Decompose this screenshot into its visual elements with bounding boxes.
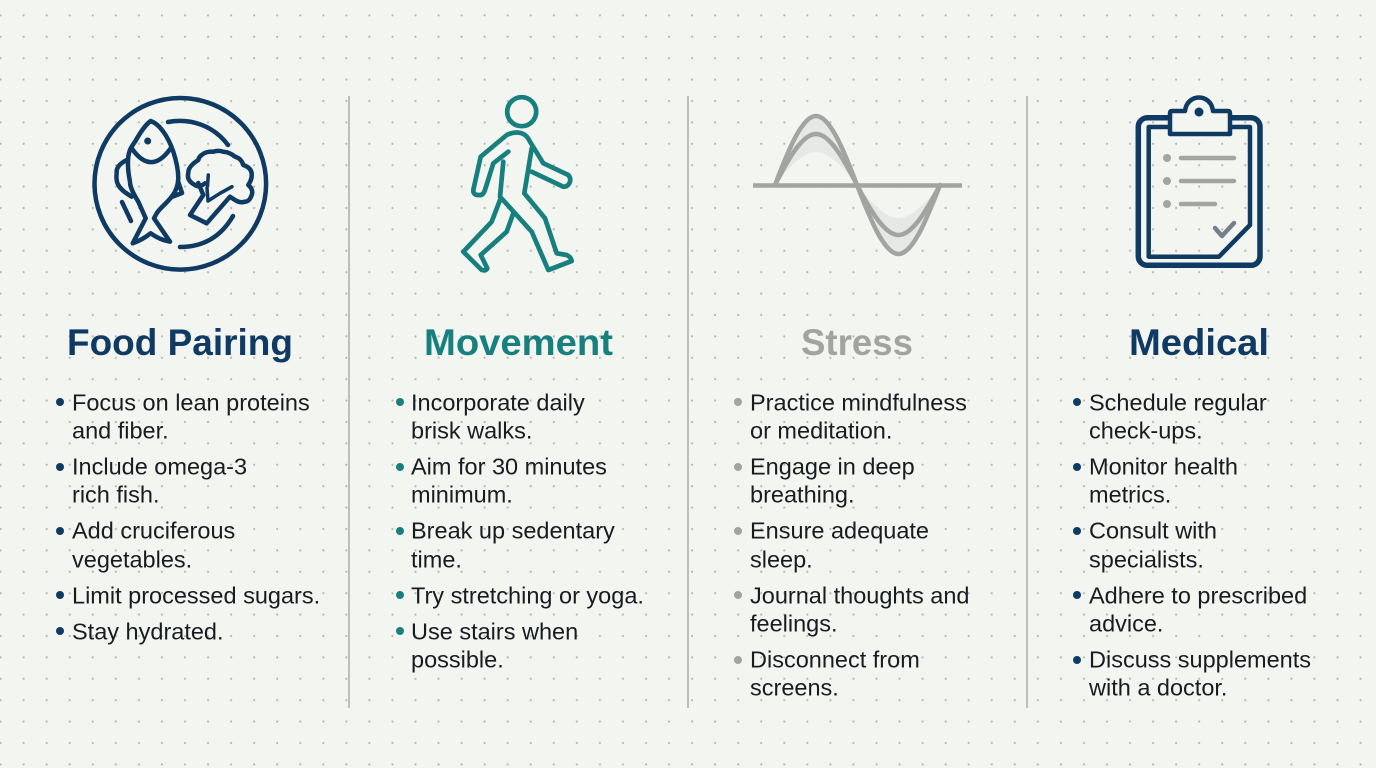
- bullet list: Aim for 30 minutes: [411, 453, 607, 479]
- bullet list: metrics.: [1089, 481, 1171, 507]
- bullet list: [734, 389, 970, 700]
- panel: Movement: [396, 97, 644, 672]
- bullet list: breathing.: [750, 481, 855, 507]
- bullet list: vegetables.: [72, 546, 192, 572]
- bullet list: rich fish.: [72, 481, 160, 507]
- bullet list: Stay hydrated.: [72, 618, 224, 644]
- bullet list: [396, 389, 644, 672]
- heading: Food Pairing: [67, 322, 293, 363]
- bullet list: specialists.: [1089, 546, 1204, 572]
- bullet list: Add cruciferous: [72, 517, 235, 543]
- bullet list: Consult with: [1089, 517, 1217, 543]
- bullet list: feelings.: [750, 610, 838, 636]
- bullet list: Practice mindfulness: [750, 389, 967, 415]
- panel: Stress: [734, 116, 970, 700]
- bullet list: time.: [411, 546, 462, 572]
- heading: Stress: [801, 322, 913, 363]
- bullet list: [1073, 389, 1311, 700]
- bullet list: with a doctor.: [1088, 674, 1227, 700]
- bullet list: Include omega-3: [72, 453, 247, 479]
- heading: Medical: [1129, 322, 1269, 363]
- bullet list: Schedule regular: [1089, 389, 1267, 415]
- bullet list: Disconnect from: [750, 646, 920, 672]
- bullet list: minimum.: [411, 481, 513, 507]
- bullet list: Ensure adequate: [750, 517, 929, 543]
- bullet list: Limit processed sugars.: [72, 582, 320, 608]
- bullet list: screens.: [750, 674, 839, 700]
- bullet list: Break up sedentary: [411, 517, 615, 543]
- panel: Medical: [1073, 98, 1311, 700]
- heading: Movement: [424, 322, 613, 363]
- bullet list: brisk walks.: [411, 417, 532, 443]
- bullet list: Journal thoughts and: [750, 582, 970, 608]
- bullet list: or meditation.: [750, 417, 892, 443]
- icon: fish and broccoli on plate: [94, 98, 266, 270]
- bullet list: possible.: [411, 646, 504, 672]
- bullet list: advice.: [1089, 610, 1163, 636]
- bullet list: [56, 389, 320, 644]
- bullet list: Focus on lean proteins: [72, 389, 310, 415]
- bullet list: Monitor health: [1089, 453, 1238, 479]
- icon: clipboard: [1138, 98, 1260, 265]
- icon: sine wave: [753, 116, 962, 254]
- panel: Food Pairing: [56, 98, 320, 644]
- bullet list: Use stairs when: [411, 618, 578, 644]
- bullet list: and fiber.: [72, 417, 169, 443]
- bullet list: Incorporate daily: [411, 389, 585, 415]
- bullet list: Discuss supplements: [1089, 646, 1311, 672]
- bullet list: check-ups.: [1089, 417, 1203, 443]
- bullet list: Try stretching or yoga.: [411, 582, 644, 608]
- bullet list: Adhere to prescribed: [1089, 582, 1307, 608]
- icon: walking person: [463, 97, 572, 270]
- bullet list: sleep.: [750, 546, 813, 572]
- bullet list: Engage in deep: [750, 453, 915, 479]
